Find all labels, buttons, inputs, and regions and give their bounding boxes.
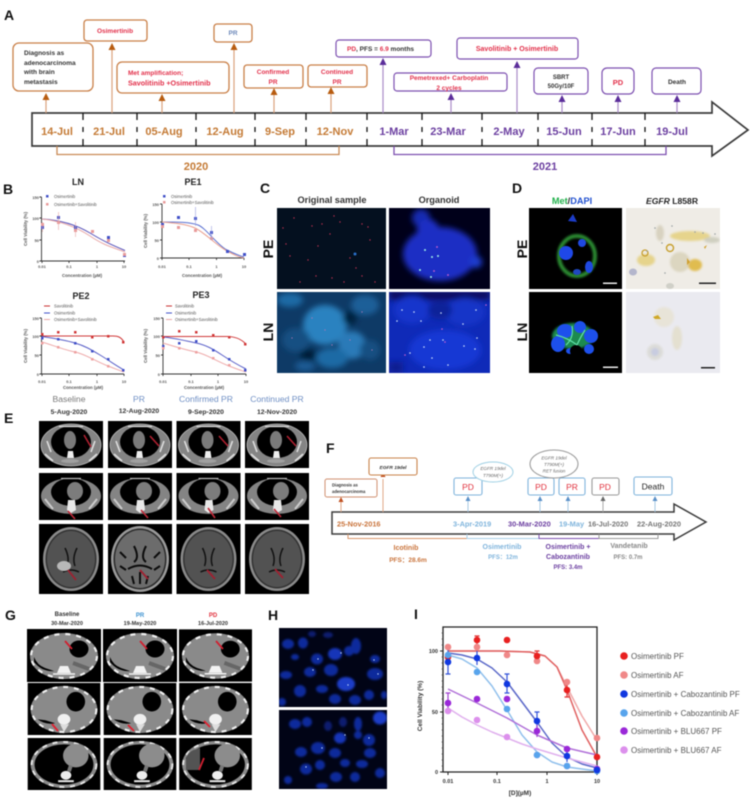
row label PE: PE [260,240,276,258]
box: diagnosis: Diagnosis as [24,50,64,57]
curves [448,651,597,771]
chart PE1: 100 [152,220,160,225]
box: confirmed PR [244,65,303,88]
chart PE3: Cell Viability (%) [143,328,148,363]
panel C: FISH images [260,180,490,373]
dates 2021: 15-Jun [546,126,582,138]
legend: Osimertinib AF [631,671,684,680]
chart PE3: Osimertinib+Savolitinib [175,317,218,322]
label osimertinib + cabozantinib [546,544,590,571]
chart PE1: 1 [215,264,218,269]
row label PE: PE [514,240,530,258]
box: SBRT: 50Gy/10F [548,84,575,90]
chart PE3: 0 [158,372,161,377]
column header confirmed PR: Confirmed PR [179,394,233,404]
arrows [341,479,655,512]
box: EGFR 19del [369,458,417,475]
heading Met/DAPI: Met/DAPI [552,196,592,206]
dates: 19-May [559,520,585,528]
box: death: Death [668,79,686,86]
box: diagnosis: with brain [23,69,55,76]
box: PD PFS 6.9 months [336,40,431,57]
chart PE1: 0.01 [158,264,167,269]
box: PD: PD [462,482,474,492]
chart PE1 [143,177,247,278]
box: PD: PD [535,482,547,492]
dates 2020: 12-Nov [317,126,354,138]
dates 2021: 1-Mar [379,126,409,138]
label icotinib: Icotinib [394,545,418,552]
column header continued PR: 12-Nov-2020 [257,409,297,416]
box: pemetrexed + carboplatin [394,73,507,92]
column header PD: PD [209,613,218,619]
image: LN original [277,292,386,373]
ellipse: EGFR 19del T790M: T790M(+) [483,473,503,478]
image: LN organoid [389,290,490,373]
box: death [652,68,701,94]
chart PE1: Osimertinib [171,194,193,199]
data points: Osimertinib AF [445,644,600,741]
box: PD [602,68,634,94]
panel A: treatment timeline 2020-2021 [4,7,748,173]
box: met amplification: Met amplification; [128,70,183,77]
box: met amplification: Savolitinib +Osimertinib [128,78,211,88]
CT row 2 [39,473,309,520]
y-axis labels: 0 [435,770,438,776]
column header PR: 19-May-2020 [124,621,156,627]
box: PD [592,478,619,495]
box: diagnosis: Diagnosis as [332,482,359,488]
label vandetanib: Vandetanib [610,543,648,550]
ellipse: EGFR 19del T790M RET fusion: EGFR 19del [541,456,568,460]
legend: Osimertinib + BLU667 AF [631,746,722,755]
x-axis labels: 1 [545,779,549,785]
CT row 2 [28,683,252,735]
y-axis labels: 50 [432,710,438,716]
image H top [278,628,387,707]
box: diagnosis [325,479,377,497]
brackets [348,534,658,538]
dates [337,520,681,528]
chart PE1: 0.1 [186,264,193,269]
column header baseline: Baseline [53,394,86,404]
dates 2021: 2-May [493,126,525,138]
image: PE organoid [389,208,490,289]
heading original sample: Original sample [298,195,366,205]
ellipse: EGFR 19del T790M RET fusion: T790M(+) [544,462,564,467]
column header continued PR: Continued PR [250,394,304,404]
column header PD [198,613,228,627]
panel I: cell viability chart [414,606,740,797]
panel B: viability dose-response curves [3,177,249,390]
box: savolitinib + osimertinib [457,38,578,59]
chart LN: 150 [32,195,40,200]
label osimertinib: Osimertinib [483,544,521,551]
chart PE3 [143,290,249,390]
legend: Osimertinib + Cabozantinib PF [631,690,740,699]
label vandetanib [610,543,648,561]
column header confirmed PR [179,394,233,416]
data points: Osimertinib + BLU667 AF [445,708,600,773]
box: death [634,477,672,495]
CT row 1 [39,421,309,468]
x-axis title: [D](µM) [509,790,531,797]
dates: 22-Aug-2020 [637,520,681,528]
chart PE3: Osimertinib [175,310,197,316]
box: PD PFS 6.9 months: PD, PFS = 6.9 months [347,46,414,53]
column header PR: 12-Aug-2020 [119,408,159,415]
chart PE3: PE3 [192,290,210,300]
chart PE2: Osimertinib [54,310,76,316]
dates: 16-Jul-2020 [588,520,628,528]
timeline arrow [332,504,706,540]
box: osimertinib: Osimertinib [97,28,133,35]
legend: Osimertinib + BLU667 PF [631,727,722,736]
column header PR: PR [133,394,145,404]
chart LN: Osimertinib [54,194,76,199]
box: PD: PD [613,78,624,87]
chart LN: 0 [37,259,40,264]
column header PD: 16-Jul-2020 [198,621,228,627]
chart PE2: 0.01 [38,379,47,384]
label osimertinib + cabozantinib: Cabozantinib [546,554,590,561]
arrows 2020 [42,43,334,113]
chart PE2: 100 [32,334,40,339]
dates 2020: 12-Aug [206,126,244,138]
image: PE original [277,208,386,289]
dates 2020: 21-Jul [93,126,125,138]
MRI row [39,524,309,594]
box: confirmed PR: Confirmed [257,69,289,76]
image: LN Met/DAPI [529,292,622,373]
chart LN: Osimertinib+Savolitinib [54,202,97,207]
data points: Osimertinib PF [445,637,600,760]
ellipse: EGFR 19del T790M [473,462,513,482]
chart LN: 0.01 [38,264,47,269]
box: SBRT [534,68,588,94]
column header PR: PR [136,613,145,619]
box: osimertinib [84,20,147,41]
y-axis labels: 100 [429,649,438,655]
chart LN: Concentration (µM) [62,273,103,278]
dates 2021 [379,126,688,138]
panel D: Met/DAPI and EGFR L858R staining [512,180,720,373]
bracket 2020 [57,146,339,154]
chart LN: 0.1 [66,264,73,269]
CT row 1 [27,629,252,682]
box: PR [559,478,585,495]
column header baseline: 5-Aug-2020 [51,409,88,416]
label icotinib: PFS：28.6m [389,557,427,564]
chart PE2: 0.1 [66,379,73,384]
data points: Osimertinib + Cabozantinib AF [445,652,600,774]
panel letter D: D [512,180,522,196]
chart PE1: 10 [242,264,247,269]
chart PE1: 150 [152,202,160,207]
ellipse: EGFR 19del T790M RET fusion: RET fusion [543,468,566,474]
panel letter G: G [5,607,16,623]
label 2021: 2021 [533,161,557,173]
box: SBRT: SBRT [553,75,569,81]
chart PE3: Concentration (µM) [184,385,225,390]
chart LN: 50 [35,238,40,243]
box: diagnosis: metastasis [24,79,58,86]
dates 2020: 14-Jul [41,126,73,138]
box: diagnosis [13,43,93,91]
chart PE3: 0.1 [188,379,195,384]
chart PE1: 0 [157,256,160,261]
box: diagnosis: adenocarcinoma [332,489,366,494]
heading organoid: Organoid [419,195,459,205]
panel letter E: E [4,410,13,426]
chart PE2: Concentration (µM) [63,385,104,390]
box: pemetrexed + carboplatin: 2 cycles [436,85,462,92]
chart LN: Cell Viability (%) [23,211,28,246]
timeline arrow [32,102,748,156]
chart PE2: Savolitinib [54,304,74,308]
chart PE3: 150 [153,316,161,321]
chart PE2: 10 [122,379,127,384]
label icotinib [389,545,427,564]
column header PR [124,613,156,627]
heading EGFR L858R: EGFR L858R [646,196,699,206]
row label LN: LN [260,323,276,341]
chart PE3: Savolitinib [175,304,195,308]
chart PE3: 0.01 [159,379,168,384]
column header PR [119,394,159,415]
y-axis labels [429,649,438,776]
panel letter I: I [414,606,418,622]
chart PE1: Osimertinib+Savolitinib [171,200,214,205]
arrows 2021 [380,58,680,113]
legend: Osimertinib PF [631,652,684,661]
box: savolitinib + osimertinib: Savolitinib + Osimertinib [476,46,558,53]
chart PE2: Cell Viability (%) [23,328,28,363]
dates 2021: 23-Mar [430,126,466,138]
box: pemetrexed + carboplatin: Pemetrexed+ Carboplatin [410,75,488,82]
row label LN: LN [514,323,530,341]
chart PE2: 0 [37,372,40,377]
ellipse: EGFR 19del T790M RET fusion [530,450,578,478]
chart LN: 100 [32,216,40,221]
label osimertinib: PFS：12m [488,554,518,561]
error bars [446,636,570,762]
column header baseline: 30-Mar-2020 [51,621,83,627]
x-axis labels [443,779,600,785]
panel G: serial CT scans [5,607,252,790]
ellipse: EGFR 19del T790M: EGFR 19del [480,466,507,471]
chart PE2: 50 [35,353,40,358]
panel letter A: A [4,7,14,23]
box: met amplification [117,62,229,93]
chart PE1: 50 [155,238,160,243]
chart PE2 [23,291,127,390]
chart PE3: 100 [153,334,161,339]
column header confirmed PR: 9-Sep-2020 [188,409,224,416]
x-axis labels: 0.01 [443,779,453,785]
box: PR: PR [228,30,238,37]
chart PE2: 150 [32,316,40,321]
image: LN EGFR stain [626,292,720,373]
panel F: second patient timeline [325,440,706,571]
column header baseline: Baseline [55,612,80,618]
panel E: serial imaging [4,394,309,594]
arrow heads [338,472,658,502]
column header baseline [51,612,83,627]
column header baseline [51,394,88,416]
box: PD [454,478,482,495]
box: PD: PD [599,482,611,492]
box: death: Death [642,482,665,492]
box: PR: PR [566,482,578,492]
panel letter C: C [260,180,270,196]
dates 2020: 05-Aug [145,126,183,138]
chart PE2: 1 [96,379,99,384]
label 2020: 2020 [184,161,208,173]
label osimertinib + cabozantinib: Osimertinib + [546,544,590,551]
chart PE3: 10 [244,379,249,384]
y-axis title: Cell Viability (%) [417,681,424,731]
x-axis labels: 10 [594,779,600,785]
dates 2020 [41,126,354,138]
box: confirmed PR: PR [268,79,278,86]
box: continued PR: PR [332,79,342,86]
dates 2021: 19-Jul [656,126,688,138]
dates: 30-Mar-2020 [508,520,551,528]
image: PE EGFR stain [626,208,720,289]
chart PE2: PE2 [72,291,90,301]
label vandetanib: PFS: 0.7m [613,555,643,561]
chart PE1: Concentration (µM) [182,273,223,278]
label osimertinib + cabozantinib: PFS: 3.4m [553,565,583,571]
dates: 3-Apr-2019 [453,520,491,528]
chart PE1: Cell Viability (%) [143,213,148,248]
panel letter B: B [3,181,13,197]
chart PE1: PE1 [184,177,202,187]
chart PE3: 1 [217,379,220,384]
chart LN: 10 [122,264,127,269]
box: continued PR [308,65,367,87]
panel letter F: F [326,440,335,456]
dates 2020: 9-Sep [265,126,295,138]
chart LN [23,177,127,278]
legend [620,652,740,755]
data points: Osimertinib + BLU667 PF [445,696,600,772]
x-axis labels: 0.1 [493,779,501,785]
data points: Osimertinib + Cabozantinib PF [445,655,600,773]
box: PR [214,24,252,42]
axes [440,627,597,775]
chart LN: 1 [96,264,99,269]
chart PE2: Osimertinib+Savolitinib [54,317,97,322]
image: PE Met/DAPI [529,208,622,289]
box: EGFR 19del: EGFR 19del [380,465,407,471]
CT row 3 [28,738,252,790]
dates 2021: 17-Jun [600,126,636,138]
chart PE3: 50 [156,353,161,358]
bracket 2021 [394,146,666,154]
legend: Osimertinib + Cabozantinib AF [631,709,739,718]
box: diagnosis: adenocarcinoma [24,60,76,67]
column header continued PR [250,394,304,416]
box: continued PR: Continued [321,69,353,76]
box: PD [528,478,554,495]
chart LN: LN [72,177,84,187]
dates: 25-Nov-2016 [337,520,381,528]
label osimertinib [483,544,521,561]
panel letter H: H [268,607,278,623]
panel H: nuclei images [268,607,387,789]
image H bottom [279,710,387,789]
